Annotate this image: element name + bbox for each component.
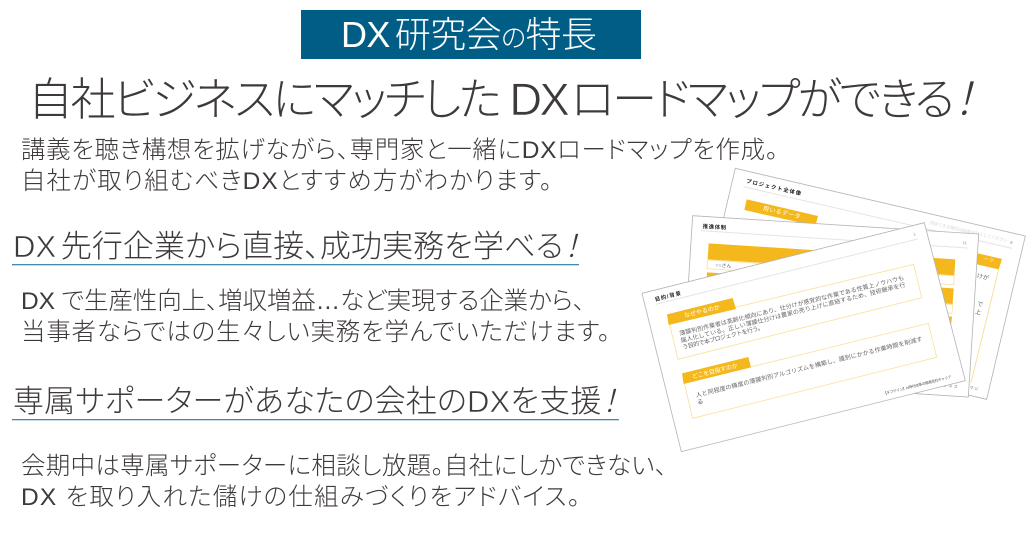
title: 自社ビジネスにマッチした DX ロードマップができる！ (28, 74, 975, 125)
text block: supporter (21, 452, 667, 511)
slide: project overview: けが (976, 271, 990, 282)
slide: project overview: プロジェクト全体像 (746, 177, 803, 197)
header band: DX 研究会の特長 (341, 14, 597, 55)
box: goal: る。 (697, 398, 705, 406)
heading: learn from leading companies: DX 先行企業から直接、成功実務を学べる！ (13, 229, 579, 264)
slide: purpose and background: 1 (913, 231, 917, 237)
slide: project structure: ビジネス (938, 382, 958, 389)
slide: project overview: 用いるデータ (762, 204, 801, 221)
slide: project structure: ○○さん (715, 262, 732, 270)
box: goal (682, 323, 937, 418)
text block: leading companies: DX で生産性向上、増収増益…など実現する企業から、 (21, 287, 585, 315)
text block: supporter: DX を取り入れた儲けの仕組みづくりをアドバイス。 (21, 483, 580, 511)
box: goal: どこを目指すのか (691, 362, 738, 381)
slide: project overview: で (976, 300, 984, 309)
box: why (667, 264, 922, 359)
text block: supporter: 会期中は専属サポーターに相談し放題。自社にしかできない、 (21, 452, 667, 480)
slide: project structure: 11 (963, 240, 968, 245)
text block: leading companies: 当事者ならではの生々しい実務を学んでいただけます。 (21, 318, 610, 346)
slide: purpose and background: 【ギフケイン】AI時代改革の推進会社キャリア (883, 374, 952, 396)
text block: intro: 自社が取り組むべきDXとすすめ方がわかります。 (21, 167, 552, 195)
text block: leading companies (21, 287, 610, 346)
slide: project structure (682, 216, 979, 397)
box: why: 薄膜判別作業者は高齢化傾向にあり、仕分けが感覚的な作業である性質上ノウハウも (679, 274, 905, 338)
heading: dedicated supporter: 専属サポーターがあなたの会社のDXを支援！ (13, 384, 617, 419)
slide: project overview: ージ (983, 256, 995, 263)
box: why: 属人化している。正しい薄膜仕分けは農家の売り上げに直結するため、技術継承を行 (680, 281, 906, 345)
box: why: なぜやるのか (683, 303, 721, 320)
slide: project overview: 回収できる場合は結果を記入してください (929, 219, 1008, 244)
slide: project overview: 8 (1010, 240, 1014, 245)
text block: intro: 講義を聴き構想を拡げながら、専門家と一緒にDXロードマップを作成。 (21, 136, 778, 164)
slide: project overview (697, 168, 1025, 399)
slide: purpose and background: 目的/背景 (654, 289, 682, 303)
slide stack (642, 168, 1025, 452)
text block: intro (21, 136, 778, 195)
slide: project overview: 上 (974, 307, 982, 317)
slide: project overview: マジ (969, 385, 979, 392)
header band (301, 10, 641, 59)
slide: purpose and background (642, 223, 965, 452)
box: goal: 人と同程度の精度の薄膜判別アルゴリズムを構築し、識別にかかる作業時間を削減す (695, 335, 923, 399)
box: why: う目的で本プロジェクトを行う。 (682, 323, 764, 351)
slide: project structure: 推進体制 (703, 222, 726, 231)
